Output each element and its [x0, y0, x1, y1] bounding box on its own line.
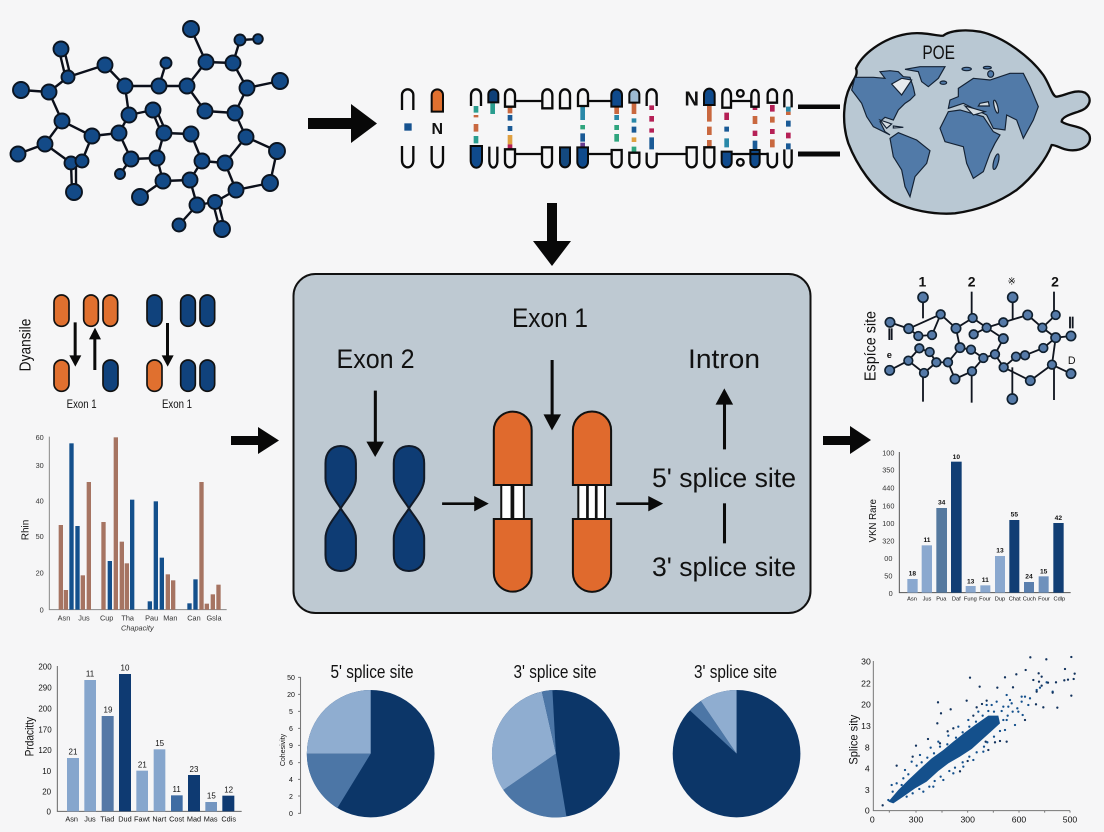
bar values: 10: [121, 664, 130, 673]
pie 1 axis: [298, 677, 301, 813]
axis labels: 440: [882, 483, 894, 492]
arrows: [69, 322, 174, 370]
axis labels: VKN Rare: [868, 499, 879, 542]
axis labels: Dud: [118, 814, 132, 823]
bar values: 15: [207, 792, 216, 801]
axis labels: 0: [46, 808, 51, 817]
label Exon 1 right: Exon 1: [162, 398, 192, 411]
label Exon 1: Exon 1: [512, 303, 588, 333]
axis labels: 320: [882, 537, 894, 546]
axis labels: Chapacity: [121, 624, 155, 633]
axis labels: Asn: [58, 614, 70, 623]
axis labels: 100: [882, 519, 894, 528]
axis labels: 50: [36, 532, 44, 541]
bottom-left bar chart: [24, 663, 242, 823]
axis labels: Fawt: [134, 814, 150, 823]
globe label: POE: [922, 43, 955, 64]
label N lower: N: [432, 121, 443, 138]
dense core: [888, 716, 1000, 803]
pie 1 axis labels: 4: [289, 777, 293, 784]
axis labels: Pua: [936, 597, 947, 603]
brown bars: [59, 437, 221, 610]
network labels: [862, 274, 1076, 381]
axis labels: 22: [861, 678, 871, 688]
pie charts group: [280, 662, 800, 818]
axis labels: 3: [865, 785, 870, 795]
axis labels: Four: [979, 597, 991, 603]
bar values: 12: [224, 785, 234, 794]
bar values: [909, 454, 1062, 585]
axis labels: Pau: [145, 614, 158, 623]
bar values: 24: [1025, 574, 1033, 581]
bar values: 11: [923, 537, 931, 544]
pie 2 title: 3' splice site: [514, 662, 596, 682]
axis labels: Dup: [995, 597, 1005, 603]
molecule diagram: [10, 21, 288, 237]
bar values: 13: [996, 548, 1004, 555]
axis labels: Jus: [923, 597, 932, 603]
pie 1 axis labels: 2: [289, 794, 293, 801]
axis labels: Can: [187, 614, 201, 623]
central panel: [294, 274, 810, 613]
network labels: 2: [968, 274, 976, 290]
pie 1 axis labels: 5: [289, 709, 293, 716]
bar values: 42: [1055, 515, 1062, 522]
axis labels: 00: [884, 554, 892, 563]
side label: Dyansile: [17, 319, 34, 371]
axis labels: 13: [861, 721, 871, 731]
bar values: 11: [86, 670, 95, 679]
axis labels: 0: [40, 606, 44, 615]
network labels: e: [887, 350, 892, 360]
pie shapes: [298, 677, 800, 818]
axis labels: 120: [38, 746, 52, 755]
bar values: 21: [69, 748, 78, 757]
axis labels: Gsla: [206, 614, 222, 623]
axis labels: Cuch: [1023, 597, 1036, 603]
axis labels: 50: [884, 571, 892, 580]
bar values: 19: [104, 706, 113, 715]
axis labels: 40: [36, 496, 44, 505]
arrow: panel to right: [823, 426, 871, 454]
globe in cell: [844, 30, 1090, 214]
y axis title: Splice sity: [847, 715, 860, 765]
bar values: 21: [138, 760, 147, 769]
blue square marker: [404, 123, 412, 131]
pie 1 axis labels: 20: [287, 692, 295, 699]
pie 1 axis labels: 6: [289, 760, 293, 767]
grouped bar chart: [20, 433, 227, 633]
pie 3 title: 3' splice site: [694, 662, 777, 682]
axis labels: Chat: [1009, 597, 1021, 603]
label Exon 1 left: Exon 1: [67, 398, 97, 411]
axis labels: 200: [38, 704, 52, 713]
bar values: [69, 664, 234, 801]
axis labels: Cup: [100, 614, 113, 623]
axis labels: Nart: [152, 814, 166, 823]
axis labels: Fung: [964, 597, 977, 603]
exon capsule schematic: [17, 295, 215, 411]
axis labels: [868, 448, 1065, 603]
bar values: 15: [1040, 568, 1048, 575]
network diagram: [862, 274, 1076, 404]
axis labels: Prdacitty: [24, 717, 37, 756]
axis labels: 290: [38, 683, 52, 692]
axis labels: 170: [38, 725, 52, 734]
bar values: 13: [967, 578, 975, 585]
axis labels: 350: [882, 466, 894, 475]
axis labels: Jus: [78, 614, 90, 623]
bar values: 55: [1011, 512, 1018, 519]
axis labels: 20: [36, 568, 44, 577]
arrow: molecule to strand: [308, 104, 377, 143]
axis labels: 10: [42, 767, 52, 776]
axis labels: 0: [870, 814, 875, 824]
pie 1 axis labels: 6: [289, 726, 293, 733]
bar values: 15: [155, 739, 165, 748]
scatter plot: [847, 657, 1077, 824]
axis labels: [20, 433, 222, 633]
axis labels: Cdis: [221, 814, 236, 823]
panel drawings: [325, 360, 733, 592]
axis labels: 20: [42, 788, 52, 797]
label Intron: Intron: [688, 344, 760, 374]
network labels: D: [1068, 355, 1076, 367]
network labels: ※: [1007, 277, 1016, 288]
bar values: 34: [938, 500, 946, 507]
axis labels: 8: [865, 742, 870, 752]
axis labels: [861, 657, 1077, 824]
axis labels: Daf: [952, 597, 961, 603]
pie 1 title: 5' splice site: [330, 662, 414, 682]
axis labels: 200: [38, 663, 52, 672]
arrow: strand to panel: [533, 203, 571, 266]
arrow: left to panel: [231, 427, 279, 454]
capsules: [54, 295, 215, 391]
bar values: 11: [173, 785, 181, 794]
bar values: 11: [982, 577, 989, 584]
label Exon 2: Exon 2: [336, 344, 414, 374]
axis labels: 0: [889, 589, 893, 598]
bars: [907, 462, 1064, 593]
axis labels: Tiad: [100, 814, 114, 823]
connector bars to globe: [798, 104, 840, 156]
axis labels: Four: [1038, 597, 1050, 603]
axis labels: 100: [882, 448, 894, 457]
axis labels: Mad: [187, 814, 201, 823]
label 3' splice site: 3' splice site: [652, 552, 796, 582]
bars: [67, 674, 234, 811]
pie 1 axis labels: 9: [289, 743, 293, 750]
bar values: 18: [909, 570, 916, 577]
axis labels: Man: [163, 614, 177, 623]
bar values: 10: [953, 454, 960, 461]
network labels: 1: [918, 274, 926, 290]
right bar chart: [868, 448, 1071, 603]
continents: [852, 66, 1038, 197]
axis labels: 300: [909, 814, 923, 824]
pie 3: [673, 690, 800, 817]
axis labels: Asn: [907, 597, 917, 603]
bottom strand capsules: [402, 146, 792, 168]
axis labels: 4: [865, 764, 870, 774]
axis labels: Jus: [84, 814, 96, 823]
network labels: 2: [1051, 274, 1059, 290]
pie 1 axis labels: Cohesivity: [280, 733, 287, 766]
icon: orange exon pair: [494, 411, 611, 592]
pie 2: [492, 690, 620, 818]
pie 1 axis labels: 50: [287, 675, 295, 682]
pie 1: [307, 690, 435, 817]
axis labels: 30: [861, 657, 871, 667]
axis labels: Cdlp: [1054, 597, 1065, 603]
icon: blue chromosomes: [325, 446, 424, 571]
axis labels: Mas: [204, 814, 218, 823]
axis labels: 600: [1012, 814, 1026, 824]
axis labels: Tha: [121, 614, 135, 623]
axis labels: 160: [882, 501, 894, 510]
axis labels: 30: [36, 461, 44, 470]
pie 1 axis labels: [280, 675, 295, 818]
axis labels: Asn: [65, 814, 78, 823]
axis labels: 500: [1063, 814, 1077, 824]
scatter dots: [888, 682, 1053, 800]
pie 1 axis labels: 0: [289, 811, 293, 818]
axis labels: Cost: [169, 814, 184, 823]
axis labels: 20: [861, 699, 871, 709]
label N upper: N: [684, 89, 699, 111]
network labels: Espíce site: [862, 311, 879, 381]
axis labels: 60: [36, 433, 44, 442]
panel arrows: [366, 360, 733, 543]
label 5' splice site: 5' splice site: [652, 463, 796, 493]
top strand capsules: [402, 89, 792, 112]
splice strand diagram: [402, 89, 792, 168]
axis labels: 0: [865, 806, 870, 816]
axis labels: 300: [960, 814, 975, 824]
blue bars: [69, 443, 198, 610]
axis labels: [24, 663, 236, 823]
colored base pairs: [474, 103, 791, 152]
axis labels: Rhin: [20, 520, 31, 540]
bar values: 23: [190, 765, 199, 774]
